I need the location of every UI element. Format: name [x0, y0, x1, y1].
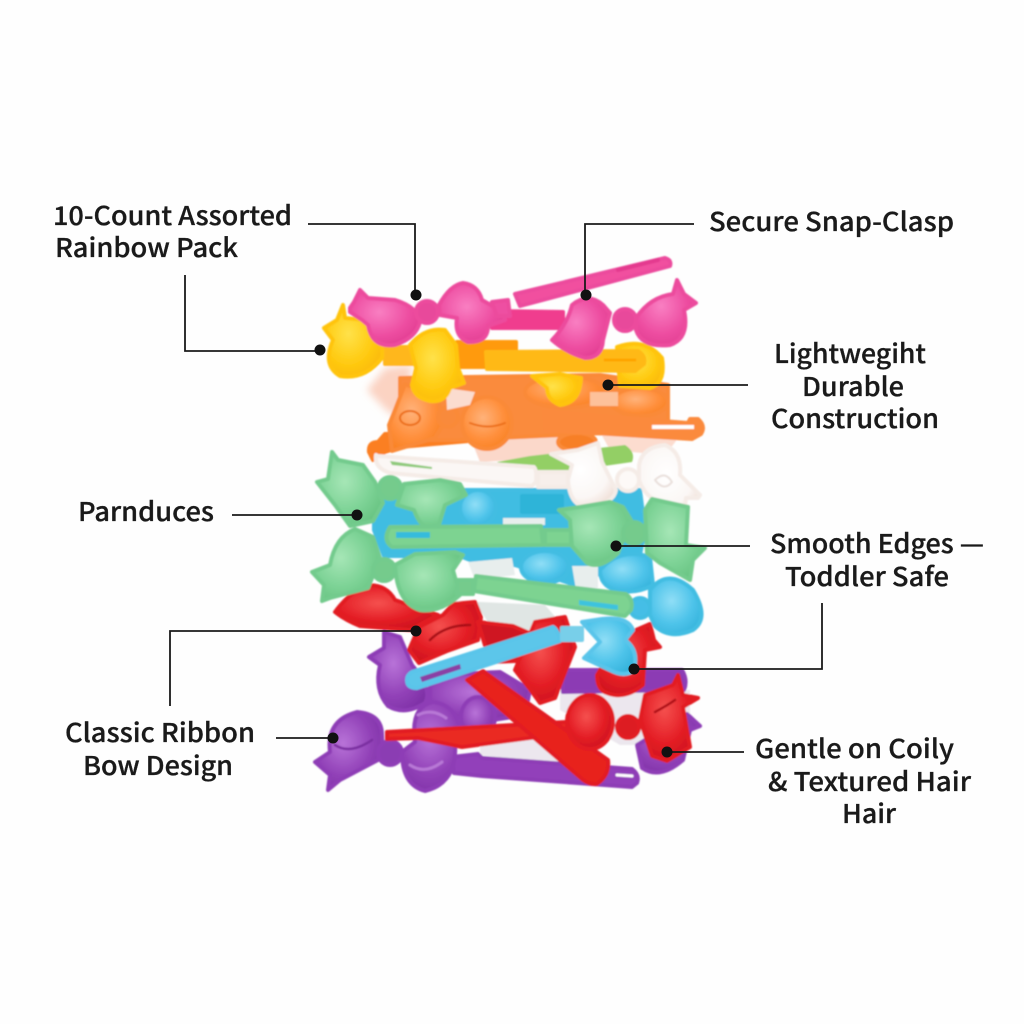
callout: gentle: & Textured Hair — [768, 762, 971, 799]
callout: lightweight: Durable — [802, 367, 904, 404]
white clip — [376, 443, 700, 516]
green back stick — [497, 445, 633, 473]
grey shadow gaps — [437, 600, 690, 765]
green clips — [312, 452, 705, 616]
callout: ribbon bow: Bow Design — [83, 746, 233, 783]
callout: smooth edges: Smooth Edges — — [770, 524, 984, 561]
callout: 10-count: Rainbow Pack — [55, 228, 238, 265]
callout: smooth edges — [610, 524, 984, 674]
callout: gentle: Gentle on Coily — [755, 729, 954, 766]
callout: parnduces — [78, 492, 362, 529]
callout: lightweight: Lightwegiht — [774, 334, 926, 371]
orange stick — [544, 412, 703, 439]
blue lower clip — [407, 618, 635, 688]
callout: gentle — [662, 729, 971, 831]
callout: ribbon bow — [65, 626, 422, 783]
blue clip gaps — [468, 518, 598, 590]
red clips — [335, 585, 698, 784]
pink clip — [350, 258, 696, 358]
peach backing — [367, 365, 680, 462]
purple clips — [315, 632, 700, 791]
callout: snap clasp: Secure Snap-Clasp — [709, 202, 954, 239]
callout: snap clasp — [580, 202, 954, 300]
callout: ribbon bow: Classic Ribbon — [65, 713, 255, 750]
callout: parnduces: Parnduces — [78, 492, 214, 529]
callout: gentle: Hair — [842, 794, 896, 831]
callout: 10-count — [53, 196, 422, 356]
callout: lightweight — [602, 334, 939, 436]
blue clips — [374, 490, 702, 634]
callout: lightweight: Construction — [771, 399, 939, 436]
yellow clip — [324, 305, 663, 405]
orange clip — [369, 375, 668, 460]
callout: 10-count: 10-Count Assorted — [53, 196, 292, 233]
callout: smooth edges: Toddler Safe — [785, 557, 949, 594]
product photo: stack of rainbow bow clips — [312, 258, 705, 791]
